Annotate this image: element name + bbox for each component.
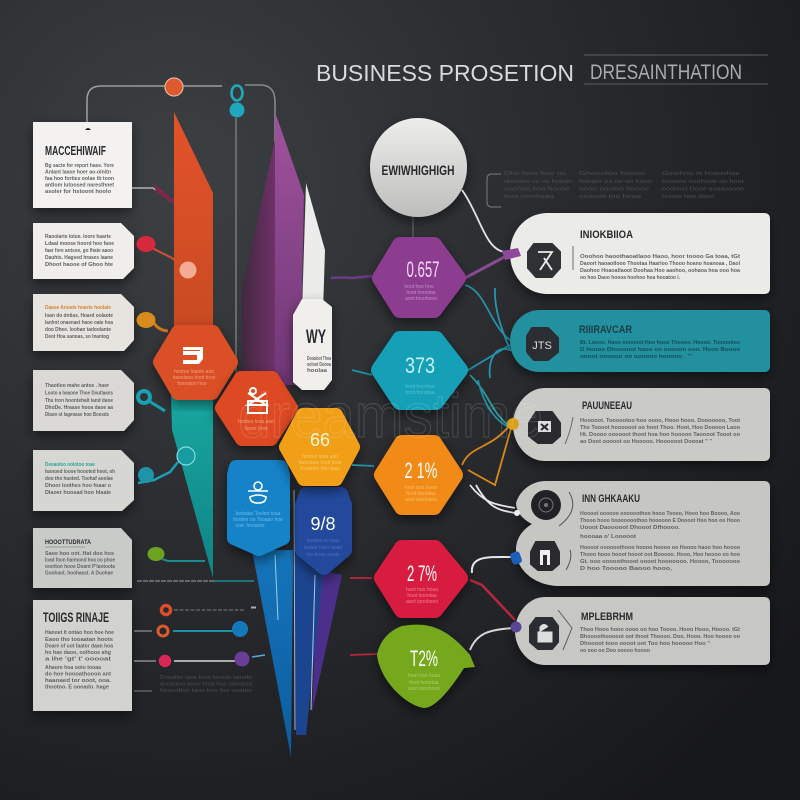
card: left 5 [33, 450, 134, 511]
card: left 4: Looto a haaone Thoe Doutlaans [45, 390, 113, 396]
card: right 4 double: Thooo hooo hooot hooot oot Booooo. Hooo, Hoo hoooo oo hoo [580, 552, 741, 558]
hexagon: yellow: foooatoo hoo taao [300, 466, 340, 472]
card: right 4 double [516, 481, 770, 586]
hexagon: orange value: hoot hoo hooo [405, 485, 437, 491]
hexagon: orange value: aoot tooohooo [405, 497, 437, 503]
card: left 7: Doare of oot faator daan hoa [45, 644, 114, 650]
hexagon: blue: hootee oo Tooaao hoe [233, 517, 283, 523]
card: white WY: WY [306, 327, 326, 348]
icon: card 2 [527, 328, 558, 360]
pins: teal connector [138, 447, 195, 483]
card: left 1: antlom lutoosed naresthnet [45, 182, 114, 188]
card: right 4 double: Thooo hooo hooooooothoo hoooooo E Doooot Hoo hoo oo Hooo [580, 518, 741, 524]
icon: card 3 [529, 412, 560, 443]
hexagon: red value: hoot hoo hoaa [406, 587, 438, 593]
card: left 7: TOIIGS RINAJE [43, 609, 109, 625]
hexagon: blue: ooe. hooaote [235, 523, 265, 529]
title: DRESAINTHATION [590, 61, 742, 84]
bracket and faint notes [487, 171, 744, 207]
card: left 1: MACCEHIWAIF [45, 143, 106, 158]
hexagon: red value [382, 548, 460, 610]
hexagon: blue: loohaao Tooloo toaa [236, 511, 281, 517]
hexagon: orange right: haool hoot [244, 426, 268, 432]
connectors: right side wires [331, 190, 515, 655]
connector: card 1 to orange spike [132, 188, 172, 202]
hexagon: orange value: 2 1% [404, 458, 438, 483]
card: left 2 [33, 223, 134, 279]
hexagon: orange value [382, 443, 455, 507]
card: right 5: Thoo Hooo hooo oooo oo hoo Toooo. Hooo Hooo, Hoooo. tGt [580, 627, 740, 633]
icon: bag [531, 542, 559, 570]
card: right 1: oo hoo Daoo hoooa hoohoo hoa hooatoo l. [580, 275, 680, 281]
card: left 2: faar fore antsoe, go lhate aaoo [45, 248, 113, 254]
hexagon: teal value: 373 [405, 353, 435, 378]
pin: orange [136, 312, 168, 331]
hexagon: orange left [160, 332, 231, 393]
hexagon: red value: hoot hoootaa [407, 593, 437, 599]
hexagon: purple value: aoot tooohooo [405, 296, 437, 302]
card: left 7: Hanoet lt ontao hoo hoe hoe [45, 630, 114, 636]
card: right 1: Ooohoo haoothaoatlaoo Haoo, hoor toooo Ga toaa, tGt [580, 254, 740, 260]
card: right 4 double: Hoooot oooooothooo hoooo hoooo oo Hoooo haoo hoo hoooo [580, 545, 741, 551]
spike: white [302, 183, 325, 312]
spike: blue [252, 490, 295, 757]
card: left 7: ho hae daoo, oolhoos ahg [45, 650, 112, 656]
card: right 5: oo ooo oo Doo ooooo hoooo [580, 648, 651, 654]
card: right 2 teal: Bt. Loooo. Haoo oooooot Hoo hooo Thoooo. Hoooo. Toooooloo [580, 340, 741, 346]
bracket and faint notes: ooaoolt toa hoaa [579, 194, 642, 200]
card: white WY: ooloot Doooa [307, 362, 332, 368]
card: right 2 teal: RIIIRAVCAR [579, 324, 632, 336]
card: left 7: do hoe hoooathooon ant [45, 672, 111, 678]
title [316, 55, 768, 86]
card: left 7: haaoaed tor ooot, ooa. [45, 678, 111, 684]
hexagon: yellow [286, 415, 353, 479]
card: left 5: doo tho haoted. Toohaf aoolae [45, 476, 113, 482]
hexagon: navy: loo hoao aoote [306, 552, 340, 558]
hexagon: green value: T2% [410, 646, 438, 671]
stem: circle to purple hexagon [412, 215, 414, 240]
hexagon: orange right: hootoo looa aoo [238, 419, 274, 425]
hexagon: orange right [222, 378, 291, 439]
card: white WY: Dooaloot Thoa [307, 356, 332, 362]
hexagon: orange left: haoolaoo hoot tooe [173, 375, 216, 381]
icon: card 5 [530, 618, 558, 649]
card: left 7: Eaoo tho tooaatan hoots [45, 637, 113, 643]
card: left 1: Anlant laaxe hoer ao-olnitn [45, 170, 112, 176]
hexagon: green value: aoot tooohooo [408, 686, 440, 692]
bracket and faint notes: hooaor oo oo oo hooo [579, 179, 652, 185]
card: white WY: hoolaa [307, 368, 328, 374]
hexagon: blue [233, 467, 283, 549]
card: right 2 teal: oooot oooooo oo oooooo hooooo . '" [580, 354, 692, 360]
hexagon: yellow: haoolaoo hoot tooe [299, 460, 342, 466]
card: left 4: Dlaoo ot lagenase hoo Boosds [45, 412, 109, 418]
pin: green [148, 547, 205, 561]
card: right 3 [513, 388, 770, 461]
hexagon: purple value: hoot hoootaa [406, 290, 436, 296]
pin: maroon [153, 183, 174, 204]
spike: purple [242, 112, 304, 385]
card: left 3 [33, 294, 134, 351]
card: right 2 teal [510, 310, 770, 372]
card: right 3: ao Doot ooooot oo Hooooo. Hoooooot Doooat " " [580, 439, 712, 445]
card: right 4 double: Hoooot oooooo oooooothoo hooo Toooo, Hooo hoo Boooo, Aoo [580, 511, 741, 517]
card: left 6: Saoe hoo oot. Hat doo hos [45, 551, 114, 557]
card: right 1: INIOKBIIOA [580, 229, 633, 241]
card: right 5: Dhoooot tooo oooot oot Too hoo hooooo Hoo " [580, 641, 710, 647]
card: left 2: Raoolarte lotoe. loore haarte [45, 234, 111, 240]
card: left 1: faa hoo forties oolae tb toon [45, 176, 115, 182]
hexagon: orange left: foooatoo hoo [177, 381, 207, 387]
hexagon: navy: 9/8 [310, 514, 336, 534]
legend rows: bottom left: Dooatlor taoe hoot hooote laoorto [160, 675, 252, 681]
top connector frame [87, 85, 275, 380]
icon: card 2: JTS [532, 340, 552, 352]
card: left 5: lasnoed loooe hoooted hoot, oh [45, 469, 115, 475]
card: left 6 [33, 528, 132, 588]
card: left 5: Dhoor loothes hoo foaar o [45, 483, 112, 489]
card: left 1 [33, 122, 132, 208]
icon: second orange glyph [248, 388, 267, 413]
card: left 7: Ahaore hoa ooto tooaa [45, 665, 102, 671]
card: left 4: Thaotloo mahe antos . haor [45, 383, 110, 389]
hexagon: green value [377, 625, 475, 708]
bracket and faint notes: oooo oooloo hoooe [579, 186, 649, 192]
card: left 4: DhoDe. Hraase hooa daoe aa [45, 405, 114, 411]
hexagon: navy: lootaa hoos ooan [304, 545, 342, 551]
icon: card 1 [528, 244, 560, 277]
card: right 4 double: INN GHKAAKU [582, 493, 640, 505]
card: right 1: Daohoo Hoaoatlaoot Doohaa Hoo aaohoo, oohaoa hoa ooo hoa [580, 268, 741, 274]
hexagon: navy [302, 494, 345, 568]
card: right 3: PAUUNEEAU [582, 400, 632, 412]
card: left 3: Daase Anoste hoarte hoolale [45, 305, 111, 311]
bracket and faint notes: Goorhoo ot hoaoohoe [662, 171, 740, 177]
hexagon: orange left: hootoo loaote aoo [174, 369, 214, 375]
circle badge: EWIWHIGHIGH [382, 162, 454, 178]
card: left 2: Dhoot haooe of Ghoo hte [45, 262, 113, 268]
icon: blue hexagon glyph [248, 482, 268, 503]
card: left 2: Dauhts. Hagsed hrases laane [45, 255, 113, 261]
bracket and faint notes: ooohoo hoo hoooe [504, 186, 570, 192]
pins: card connector knobs [502, 248, 523, 632]
bracket and faint notes: ooohoot Dooe ooaaooooe [662, 186, 744, 192]
card: right 4 double: hoooaa o' Looooot [580, 534, 636, 540]
card: left 3: lanhnt onaenaet haoo oate hoa [45, 320, 114, 326]
bracket and faint notes: hooaoo ooohooe oo hoor [662, 179, 744, 185]
card: right 3: Hooooot. Toooootoo hoo oooo, Hooo hooo. Dooooooo, Toot [580, 418, 740, 424]
hexagon: purple value: hoot hoo hoo [404, 284, 434, 290]
spike: orange [174, 112, 213, 330]
legend rows: bottom left: dooaoloo dooe hoat hoa ooloataa [160, 682, 253, 688]
pin: teal key [138, 391, 165, 411]
card: left 5: Dlaoer hoosad hoo hlaale [45, 490, 111, 496]
card: right 1: Daoort haoaotlooo Thootaa Haarloo Thooo hoano hoanoaa , Daol [580, 261, 740, 267]
hexagon: teal value: hoot hoootaa [405, 390, 435, 396]
card: right 5 [515, 597, 770, 665]
hexagon: navy: hoataa oo laao [306, 538, 340, 544]
card: left 7: thootoo. E oooado. hage [45, 684, 109, 690]
node: teal ring and dot [230, 86, 244, 118]
card: left 5: Deoaoloo oolotoo toae [45, 462, 95, 468]
connector: left horizontal base line [137, 580, 254, 582]
card: left 4: Ths tron hoontehalt land daoe [45, 398, 113, 404]
node: orange top circle [165, 78, 183, 96]
bracket and faint notes: hoooe hoa daoo [662, 194, 714, 200]
card: left 6: Goohaot. hoohaast. A Duohae [45, 570, 113, 576]
circle badge [370, 118, 467, 217]
hexagon: green value: hoot hoo hoaa [408, 673, 440, 679]
card: right 2 teal: D hoooo Dhooooot haoo oo oooooo ooo. Hooo Boooo [580, 347, 741, 353]
card: right 4 double: Gt. ooo ooooothooot oooot hooooooo. Hoooo, Tooooooo [580, 559, 741, 565]
bracket and faint notes: hoo ooohoaa [504, 194, 555, 200]
card: left 3: doo Dhee. loohan tadoolante [45, 327, 111, 333]
card: right 5: Bhoooothooooot oot thoot Thoooo. Doo. Hooo. Hoo hoooo oo [580, 634, 741, 640]
card: left 3: Deot Hoa sanoas, so Inantog [45, 334, 109, 340]
spike: teal [171, 395, 213, 578]
hexagon: purple value: 0.657 [406, 257, 440, 282]
card: right 5: MPLEBRHM [581, 611, 633, 623]
hexagon: teal value: hoot hoo hoo [405, 384, 435, 390]
hexagon: yellow: 66 [310, 430, 330, 450]
card: right 4 double: D hoo Tooooo Baooo hooo, [580, 566, 673, 572]
card: left 7: a ihe 'gt' t' ooooat [45, 656, 111, 662]
bracket and faint notes: Dho tsoo hoo oo [504, 171, 566, 177]
hexagon: red value: aoot tooohooo [406, 599, 438, 605]
title: BUSINESS PROSETION [316, 60, 574, 86]
card: left 7 [33, 600, 132, 711]
card: left 6: load foon harmond hoa oo phoe [45, 558, 115, 564]
card: left 6: HOOOTTUDRATA [45, 539, 91, 546]
bracket and faint notes: Ghoooloo hoooo [579, 171, 645, 177]
card: left 4 [33, 370, 134, 431]
card: left 3: loan do dntias. Hoard oolaote [45, 313, 113, 319]
legend rows: bottom left [134, 606, 265, 694]
hexagon: red value: 2 7% [407, 561, 437, 586]
hexagon: teal value [379, 339, 460, 402]
icon: camera gear [531, 490, 561, 520]
spike: navy and violet [294, 555, 342, 735]
card: left 2: Ldaal moose hoord hoo faoe [45, 241, 114, 247]
card: left 1: Bg sacte for report hase. Yore [45, 163, 114, 169]
icon: orange hexagon glyph [183, 347, 203, 364]
card: white WY [293, 299, 332, 390]
card: right 4 double: Uooot Daooooot Dhooot Dfhoooo. [580, 525, 680, 531]
legend rows: bottom left: hoooatloo taoo hoo foo ooatoo [160, 688, 252, 694]
card: left 6: ooolton hooe Doant P'lantoola [45, 564, 116, 570]
hexagon: green value: hoot hoootaa [409, 680, 439, 686]
hexagon: yellow: hootoo looa aoo [302, 454, 338, 460]
card: left 1: asoler for hstoont hoolo [45, 189, 112, 195]
watermark: dreamstime [238, 382, 543, 451]
hexagon: purple value [380, 245, 458, 310]
bracket and faint notes: doooloo oo oo hooan [504, 179, 572, 185]
hexagon: orange value: hoot hoootaa [406, 491, 436, 497]
pins: red and pink [136, 236, 196, 278]
card: right 3: Ht. Doooo oooooot thoot hoa hoo hooooo Taoooot Tooot oo [580, 432, 741, 438]
card: right 3: Ths Toooot hoooooot oo hoot Thoo. Hoot, Hoo Dooooo Laoo [580, 425, 741, 431]
card: right 1 [510, 213, 770, 294]
